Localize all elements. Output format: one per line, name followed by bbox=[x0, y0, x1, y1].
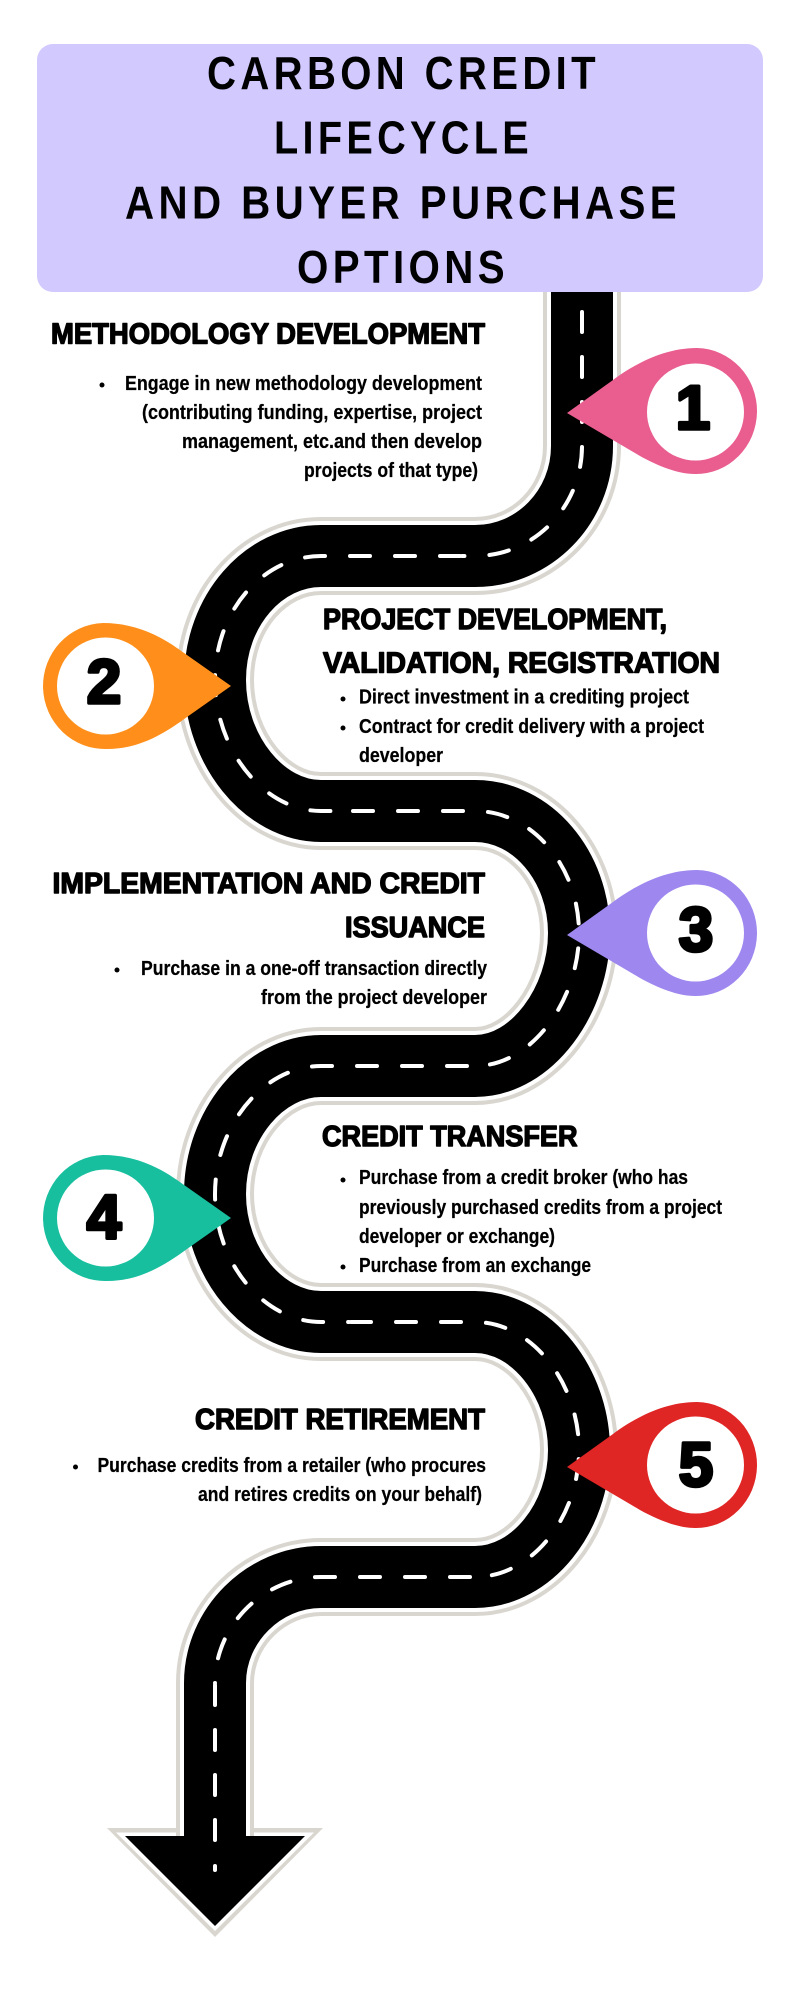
body: methodology bbox=[100, 373, 482, 482]
body: credit transfer: Purchase from a credit broker (who has bbox=[359, 1167, 688, 1189]
body: implementation bbox=[114, 958, 488, 1009]
pin 3 bbox=[567, 870, 757, 996]
body: credit transfer: previously purchased credits from a project bbox=[359, 1197, 722, 1219]
step 2 text bbox=[323, 604, 720, 767]
body: methodology: management, etc.and then develop bbox=[182, 431, 482, 453]
step 3 text bbox=[52, 868, 488, 1009]
heading: credit transfer: CREDIT TRANSFER bbox=[322, 1121, 578, 1153]
body: project development: Contract for credit delivery with a project bbox=[359, 716, 704, 738]
road centre dashes bbox=[215, 312, 582, 1870]
pin 5 bbox=[567, 1402, 757, 1528]
body: credit retirement bbox=[73, 1455, 486, 1506]
body: methodology: Engage in new methodology development bbox=[125, 373, 482, 395]
body: credit transfer: Purchase from an exchange bbox=[359, 1255, 591, 1277]
title text: CARBON CREDIT bbox=[207, 47, 600, 99]
body: project development: Direct investment in a crediting project bbox=[359, 686, 689, 708]
heading: implementation: IMPLEMENTATION AND CREDIT bbox=[52, 868, 485, 900]
pin 2: 2 bbox=[87, 648, 121, 717]
arrowhead outline bbox=[107, 1828, 323, 1937]
body: project development bbox=[340, 686, 704, 767]
body: credit transfer bbox=[340, 1167, 722, 1277]
body: methodology: (contributing funding, expertise, project bbox=[142, 402, 482, 424]
pin 1 bbox=[567, 348, 757, 474]
pin 5: 5 bbox=[679, 1431, 713, 1500]
pin 3: 3 bbox=[679, 896, 713, 965]
body: methodology: projects of that type) bbox=[304, 460, 478, 482]
body: credit retirement: Purchase credits from a retailer (who procures bbox=[98, 1455, 486, 1477]
step 5 text bbox=[73, 1404, 486, 1506]
title panel bbox=[37, 44, 763, 293]
body: implementation: Purchase in a one-off transaction directly bbox=[141, 958, 488, 980]
heading: methodology development: METHODOLOGY DEVELOPMENT bbox=[51, 318, 485, 350]
body: credit retirement: and retires credits on your behalf) bbox=[198, 1484, 482, 1506]
body: project development: developer bbox=[359, 745, 443, 767]
heading: project development: VALIDATION, REGISTRATION bbox=[323, 648, 720, 680]
step 4 text bbox=[322, 1121, 722, 1277]
title text: AND BUYER PURCHASE bbox=[125, 176, 681, 228]
road with arrowhead bbox=[107, 250, 582, 1937]
title text: OPTIONS bbox=[297, 241, 509, 293]
body: credit transfer: developer or exchange) bbox=[359, 1226, 555, 1248]
step 1 text bbox=[51, 318, 485, 482]
pin 2 bbox=[43, 623, 231, 749]
heading: project development bbox=[323, 604, 720, 680]
arrowhead bbox=[125, 1836, 305, 1926]
heading: project development: PROJECT DEVELOPMENT, bbox=[323, 604, 667, 636]
title text: LIFECYCLE bbox=[274, 112, 533, 164]
pin 4: 4 bbox=[87, 1183, 122, 1252]
pin 1: 1 bbox=[676, 374, 710, 443]
heading: implementation bbox=[52, 868, 485, 944]
heading: implementation: ISSUANCE bbox=[345, 912, 485, 944]
heading: credit retirement: CREDIT RETIREMENT bbox=[195, 1404, 485, 1436]
pin 4 bbox=[43, 1155, 231, 1281]
title text bbox=[125, 47, 681, 293]
body: implementation: from the project developer bbox=[261, 987, 487, 1009]
